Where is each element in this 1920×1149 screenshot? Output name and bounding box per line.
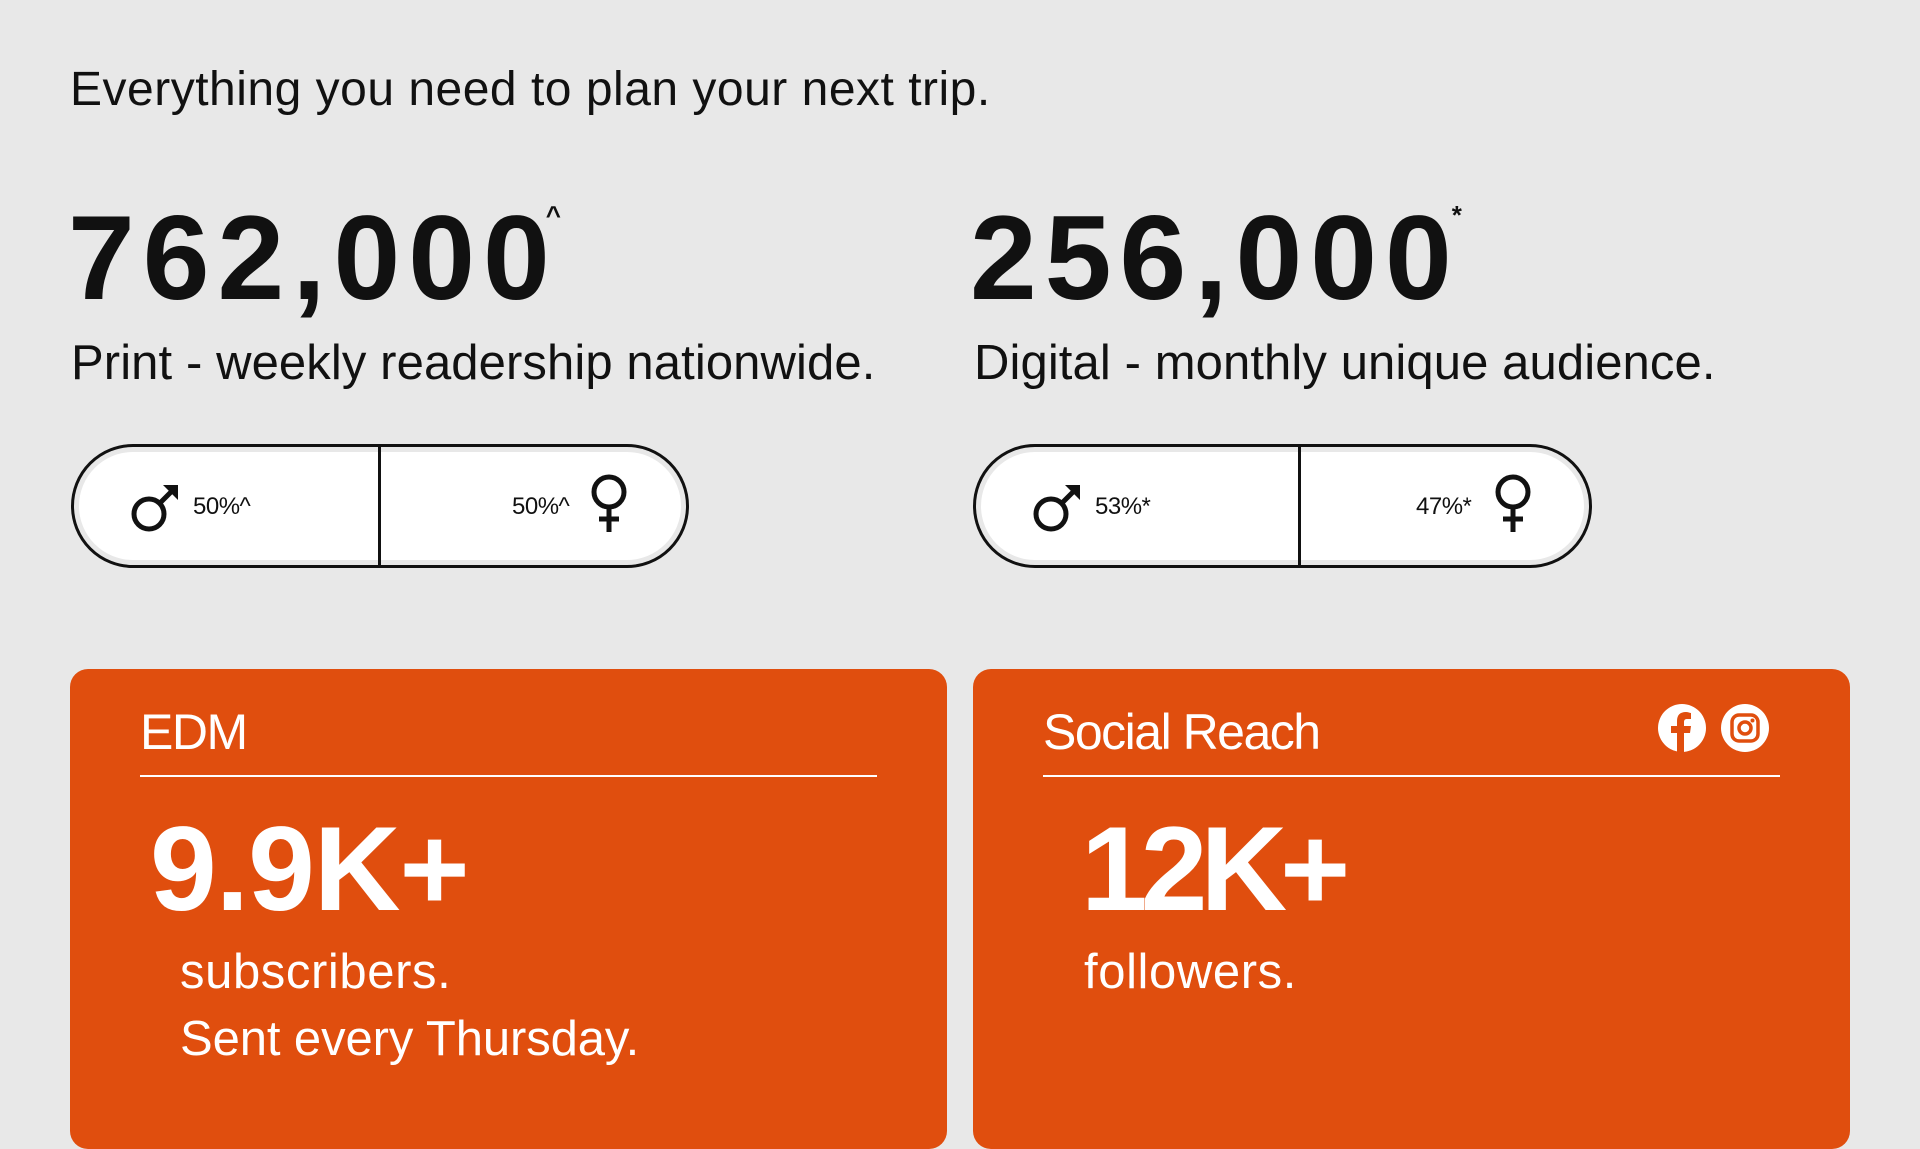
text: female 47%: 47%* [1416, 493, 1471, 520]
text: female 50%: 50%^ [512, 493, 569, 520]
icon: facebook [1658, 704, 1706, 752]
icon: female [592, 474, 626, 532]
title: Everything you need to plan your next trip. [70, 63, 991, 116]
text: sent every thursday: Sent every Thursday. [180, 1012, 639, 1066]
icon: male [1034, 485, 1080, 532]
panel: social reach [973, 669, 1850, 1149]
stat: followers: 12K+ [1081, 802, 1343, 936]
text: followers: followers. [1084, 945, 1297, 999]
stat: digital audience: 256,000* [970, 191, 1462, 325]
heading: social reach: Social Reach [1043, 704, 1320, 760]
caption: digital: Digital - monthly unique audience. [974, 336, 1716, 390]
icon: male [132, 485, 178, 532]
icon: female [1496, 474, 1530, 532]
heading: EDM: EDM [140, 704, 247, 760]
icon: instagram [1721, 704, 1769, 752]
panel: EDM [70, 669, 947, 1149]
text: subscribers: subscribers. [180, 945, 451, 999]
stat: subscribers: 9.9K+ [150, 802, 469, 936]
gender pill: print [71, 444, 689, 568]
gender pill: digital [973, 444, 1592, 568]
text: male 50%: 50%^ [193, 493, 250, 520]
caption: print: Print - weekly readership nationwide. [71, 336, 875, 390]
stat: print readership: 762,000^ [68, 191, 561, 325]
text: male 53%: 53%* [1095, 493, 1150, 520]
